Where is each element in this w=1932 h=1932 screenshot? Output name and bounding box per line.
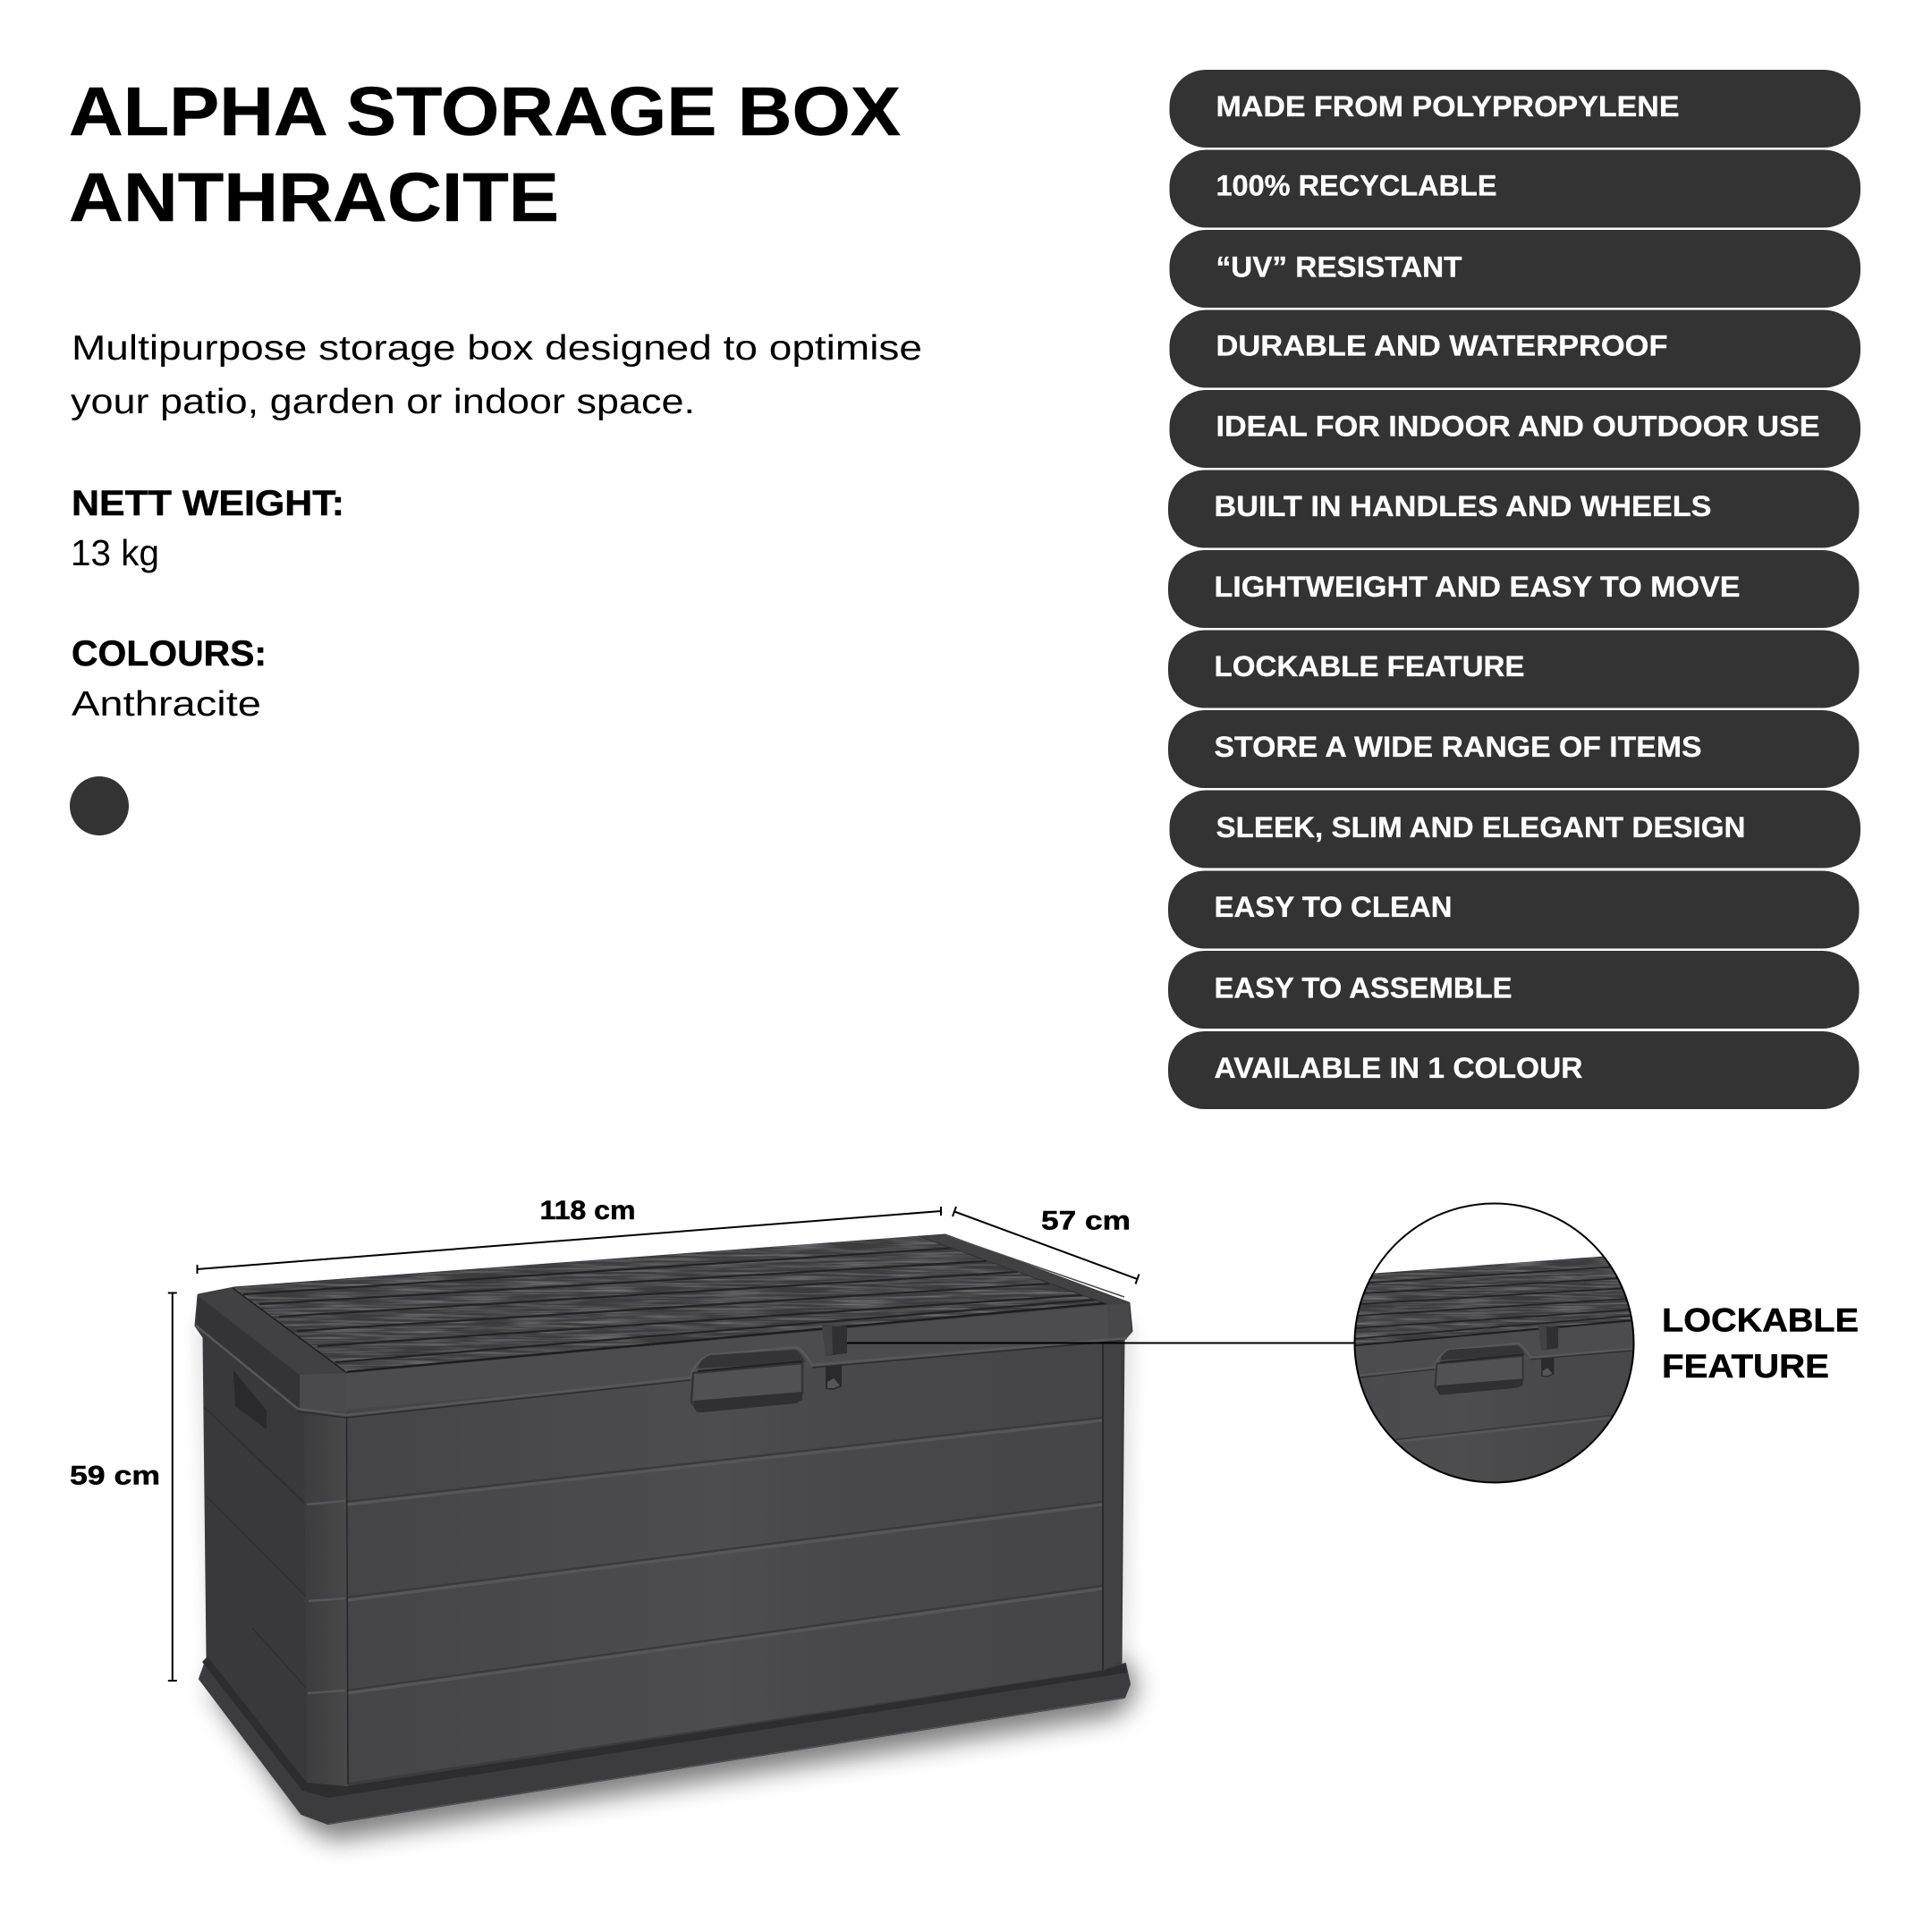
lock hasp — [822, 1326, 847, 1390]
lid — [179, 1230, 1163, 1418]
feature pill 10: SLEEK, SLIM AND ELEGANT DESIGN — [1216, 811, 1746, 843]
lid lower edge — [196, 1326, 1127, 1415]
feature pill 3 — [1170, 230, 1860, 308]
dimension: width — [197, 1196, 941, 1274]
description text — [71, 329, 922, 421]
dimension: depth — [953, 1206, 1140, 1284]
colours: COLOURS: — [72, 634, 267, 674]
box side — [204, 1333, 309, 1783]
feature pill 7 — [1168, 550, 1859, 628]
feature pill 5: IDEAL FOR INDOOR AND OUTDOOR USE — [1216, 410, 1819, 442]
feature pill 7: LIGHTWEIGHT AND EASY TO MOVE — [1215, 571, 1741, 603]
feature pill 11 — [1168, 871, 1859, 948]
feature pill 4: DURABLE AND WATERPROOF — [1216, 329, 1667, 361]
box corner column — [304, 1410, 348, 1786]
feature pill 8 — [1168, 630, 1859, 708]
feature pill 12 — [1168, 951, 1859, 1029]
feature pill 13 — [1168, 1031, 1859, 1109]
feature pill 11: EASY TO CLEAN — [1215, 891, 1453, 923]
box silhouette — [196, 1235, 1131, 1786]
feature pill 6: BUILT IN HANDLES AND WHEELS — [1215, 490, 1712, 522]
feature pill 1 — [1170, 70, 1860, 148]
feature pill 13: AVAILABLE IN 1 COLOUR — [1215, 1052, 1583, 1084]
feature list — [1168, 70, 1860, 1109]
dimension: depth: 57 cm — [1041, 1206, 1131, 1236]
magnifier: lock detail — [1354, 1202, 1635, 1483]
feature pill 9: STORE A WIDE RANGE OF ITEMS — [1215, 731, 1701, 763]
feature pill 5 — [1170, 390, 1860, 468]
callout label: LOCKABLE — [1662, 1301, 1859, 1338]
dimension: height — [70, 1293, 177, 1681]
description text: your patio, garden or indoor space. — [71, 383, 695, 421]
colours: Anthracite — [72, 685, 261, 724]
feature pill 1: MADE FROM POLYPROPYLENE — [1216, 90, 1680, 123]
nett weight — [71, 484, 344, 573]
box front panels — [347, 1338, 1103, 1784]
title: ALPHA STORAGE BOX — [69, 73, 901, 150]
feature pill 9 — [1168, 710, 1859, 788]
lid wood panel — [179, 1230, 1163, 1382]
callout label — [1662, 1301, 1859, 1385]
colours — [72, 634, 267, 724]
product: storage box — [179, 1230, 1163, 1824]
front handle — [691, 1350, 805, 1412]
side handle — [233, 1370, 267, 1429]
box right strip — [1103, 1336, 1121, 1670]
title — [69, 73, 901, 236]
feature pill 2: 100% RECYCLABLE — [1216, 170, 1497, 202]
dimension: width: 118 cm — [540, 1196, 635, 1225]
callout line — [847, 1342, 1354, 1343]
callout label: FEATURE — [1662, 1347, 1829, 1385]
title: ANTHRACITE — [69, 159, 559, 236]
description text: Multipurpose storage box designed to optimise — [72, 329, 922, 368]
feature pill 6 — [1168, 470, 1859, 547]
colour swatch — [70, 776, 129, 835]
feature pill 2 — [1170, 150, 1860, 227]
feature pill 8: LOCKABLE FEATURE — [1215, 650, 1524, 682]
box base — [199, 1657, 1130, 1824]
feature pill 10 — [1170, 791, 1860, 868]
feature pill 12: EASY TO ASSEMBLE — [1215, 971, 1512, 1004]
box shadow — [195, 1245, 1138, 1841]
dimension: height: 59 cm — [70, 1462, 160, 1490]
feature pill 4 — [1170, 309, 1860, 388]
feature pill 3: “UV” RESISTANT — [1216, 250, 1462, 283]
nett weight: 13 kg — [71, 532, 159, 573]
nett weight: NETT WEIGHT: — [72, 484, 344, 523]
